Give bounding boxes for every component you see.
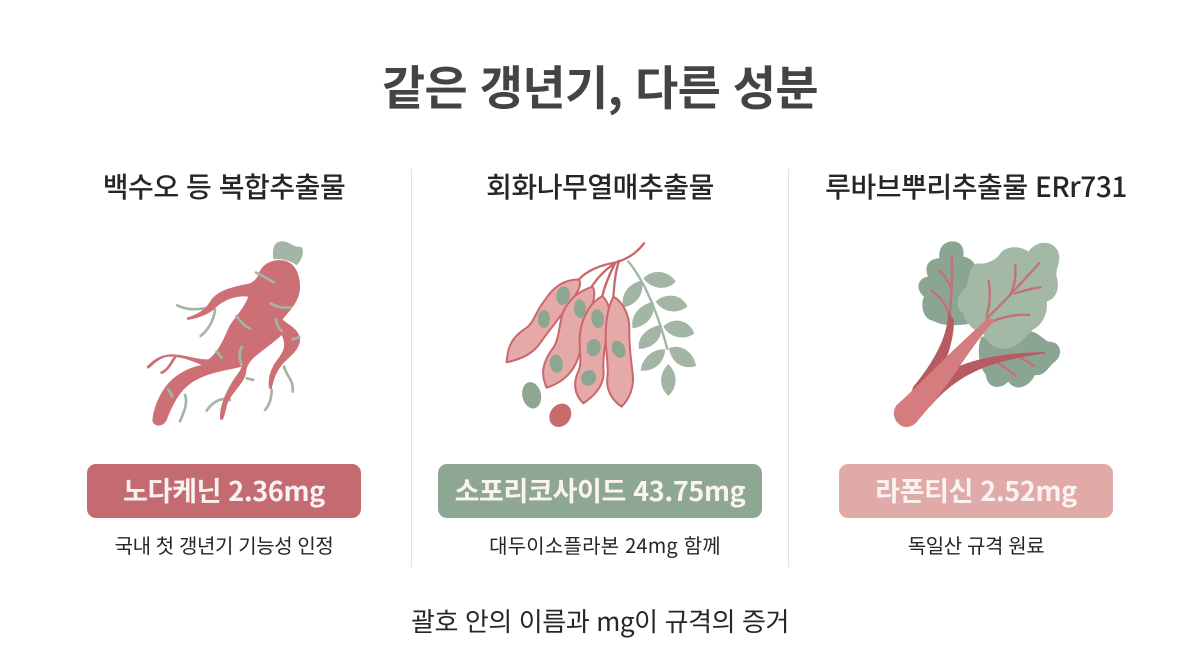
pill: nodakenin xyxy=(87,464,361,518)
footer note: 괄호 안의 이름과 mg이 규격의 증거 xyxy=(411,602,789,639)
caption: middle: 대두이소플라본 24mg 함께 xyxy=(489,530,721,559)
caption: left: 국내 첫 갱년기 기능성 인정 xyxy=(115,530,333,559)
pill: lapontin xyxy=(839,464,1113,518)
caption: right: 독일산 규격 원료 xyxy=(908,530,1044,559)
pill: nodakenin: 노다케닌 2.36mg xyxy=(123,470,325,509)
icon: pods and leaves xyxy=(507,243,696,431)
icon: root xyxy=(147,241,303,426)
pill: lapontin: 라폰티신 2.52mg xyxy=(875,470,1077,509)
heading: left column: 백수오 등 복합추출물 xyxy=(103,166,345,206)
icon: rhubarb xyxy=(894,241,1060,427)
heading: right column: 루바브뿌리추출물 ERr731 xyxy=(825,166,1127,206)
title: 같은 갱년기, 다른 성분 xyxy=(382,50,818,119)
heading: middle column: 회화나무열매추출물 xyxy=(486,166,714,206)
pill: sophoricoside: 소포리코사이드 43.75mg xyxy=(455,470,745,509)
pill: sophoricoside xyxy=(438,464,762,518)
